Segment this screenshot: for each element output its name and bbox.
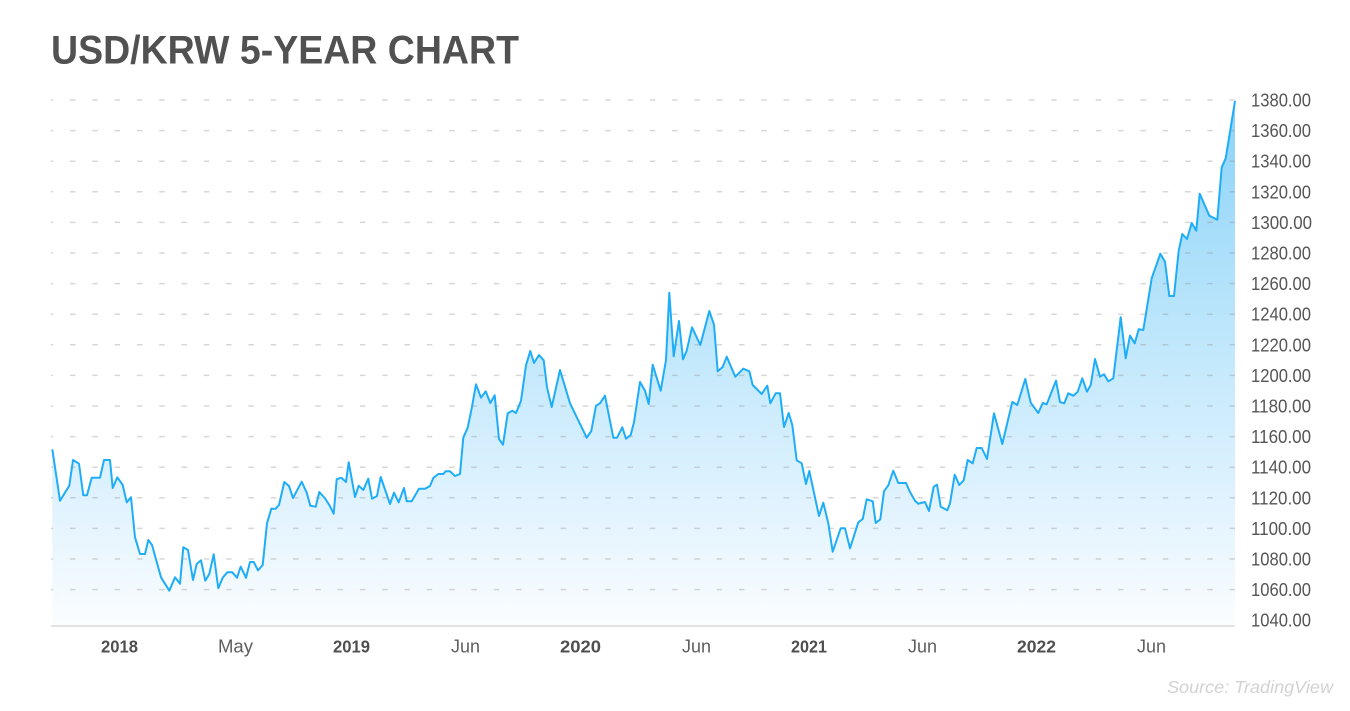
x axis line [51,625,1235,627]
x axis labels: May [218,636,253,656]
x axis labels: 2019 [333,636,370,656]
x axis labels: 2020 [560,636,601,656]
x axis labels: 2018 [101,636,138,656]
x axis labels: 2021 [791,636,827,656]
price line [52,101,1235,591]
y axis labels: 1060.00 [1251,580,1311,600]
y axis labels: 1220.00 [1251,335,1311,355]
y axis labels: 1240.00 [1251,305,1311,325]
y axis labels: 1080.00 [1251,550,1311,570]
y axis labels: 1360.00 [1251,121,1311,141]
x axis labels: Jun [682,636,711,656]
area fill under the price line [52,101,1235,626]
y axis labels: 1040.00 [1251,611,1311,631]
source note: Source: TradingView [1167,677,1334,697]
x axis labels: Jun [908,636,937,656]
y axis labels: 1180.00 [1251,396,1311,416]
y axis labels: 1300.00 [1251,213,1312,233]
x axis labels: 2022 [1017,636,1056,656]
y axis labels: 1320.00 [1251,182,1311,202]
y axis labels: 1340.00 [1251,152,1311,172]
y axis labels: 1100.00 [1251,519,1311,539]
y axis labels: 1280.00 [1251,244,1311,264]
y axis labels: 1200.00 [1251,366,1311,386]
y axis labels: 1160.00 [1251,427,1311,447]
y axis labels: 1260.00 [1251,274,1311,294]
x axis labels [101,636,1166,656]
y axis labels [1251,90,1312,631]
y axis labels: 1120.00 [1251,488,1311,508]
y axis labels: 1140.00 [1251,458,1311,478]
x axis labels: Jun [1137,636,1166,656]
x axis labels: Jun [451,636,480,656]
title: USD/KRW 5-YEAR CHART [51,28,519,72]
y axis labels: 1380.00 [1251,90,1311,110]
